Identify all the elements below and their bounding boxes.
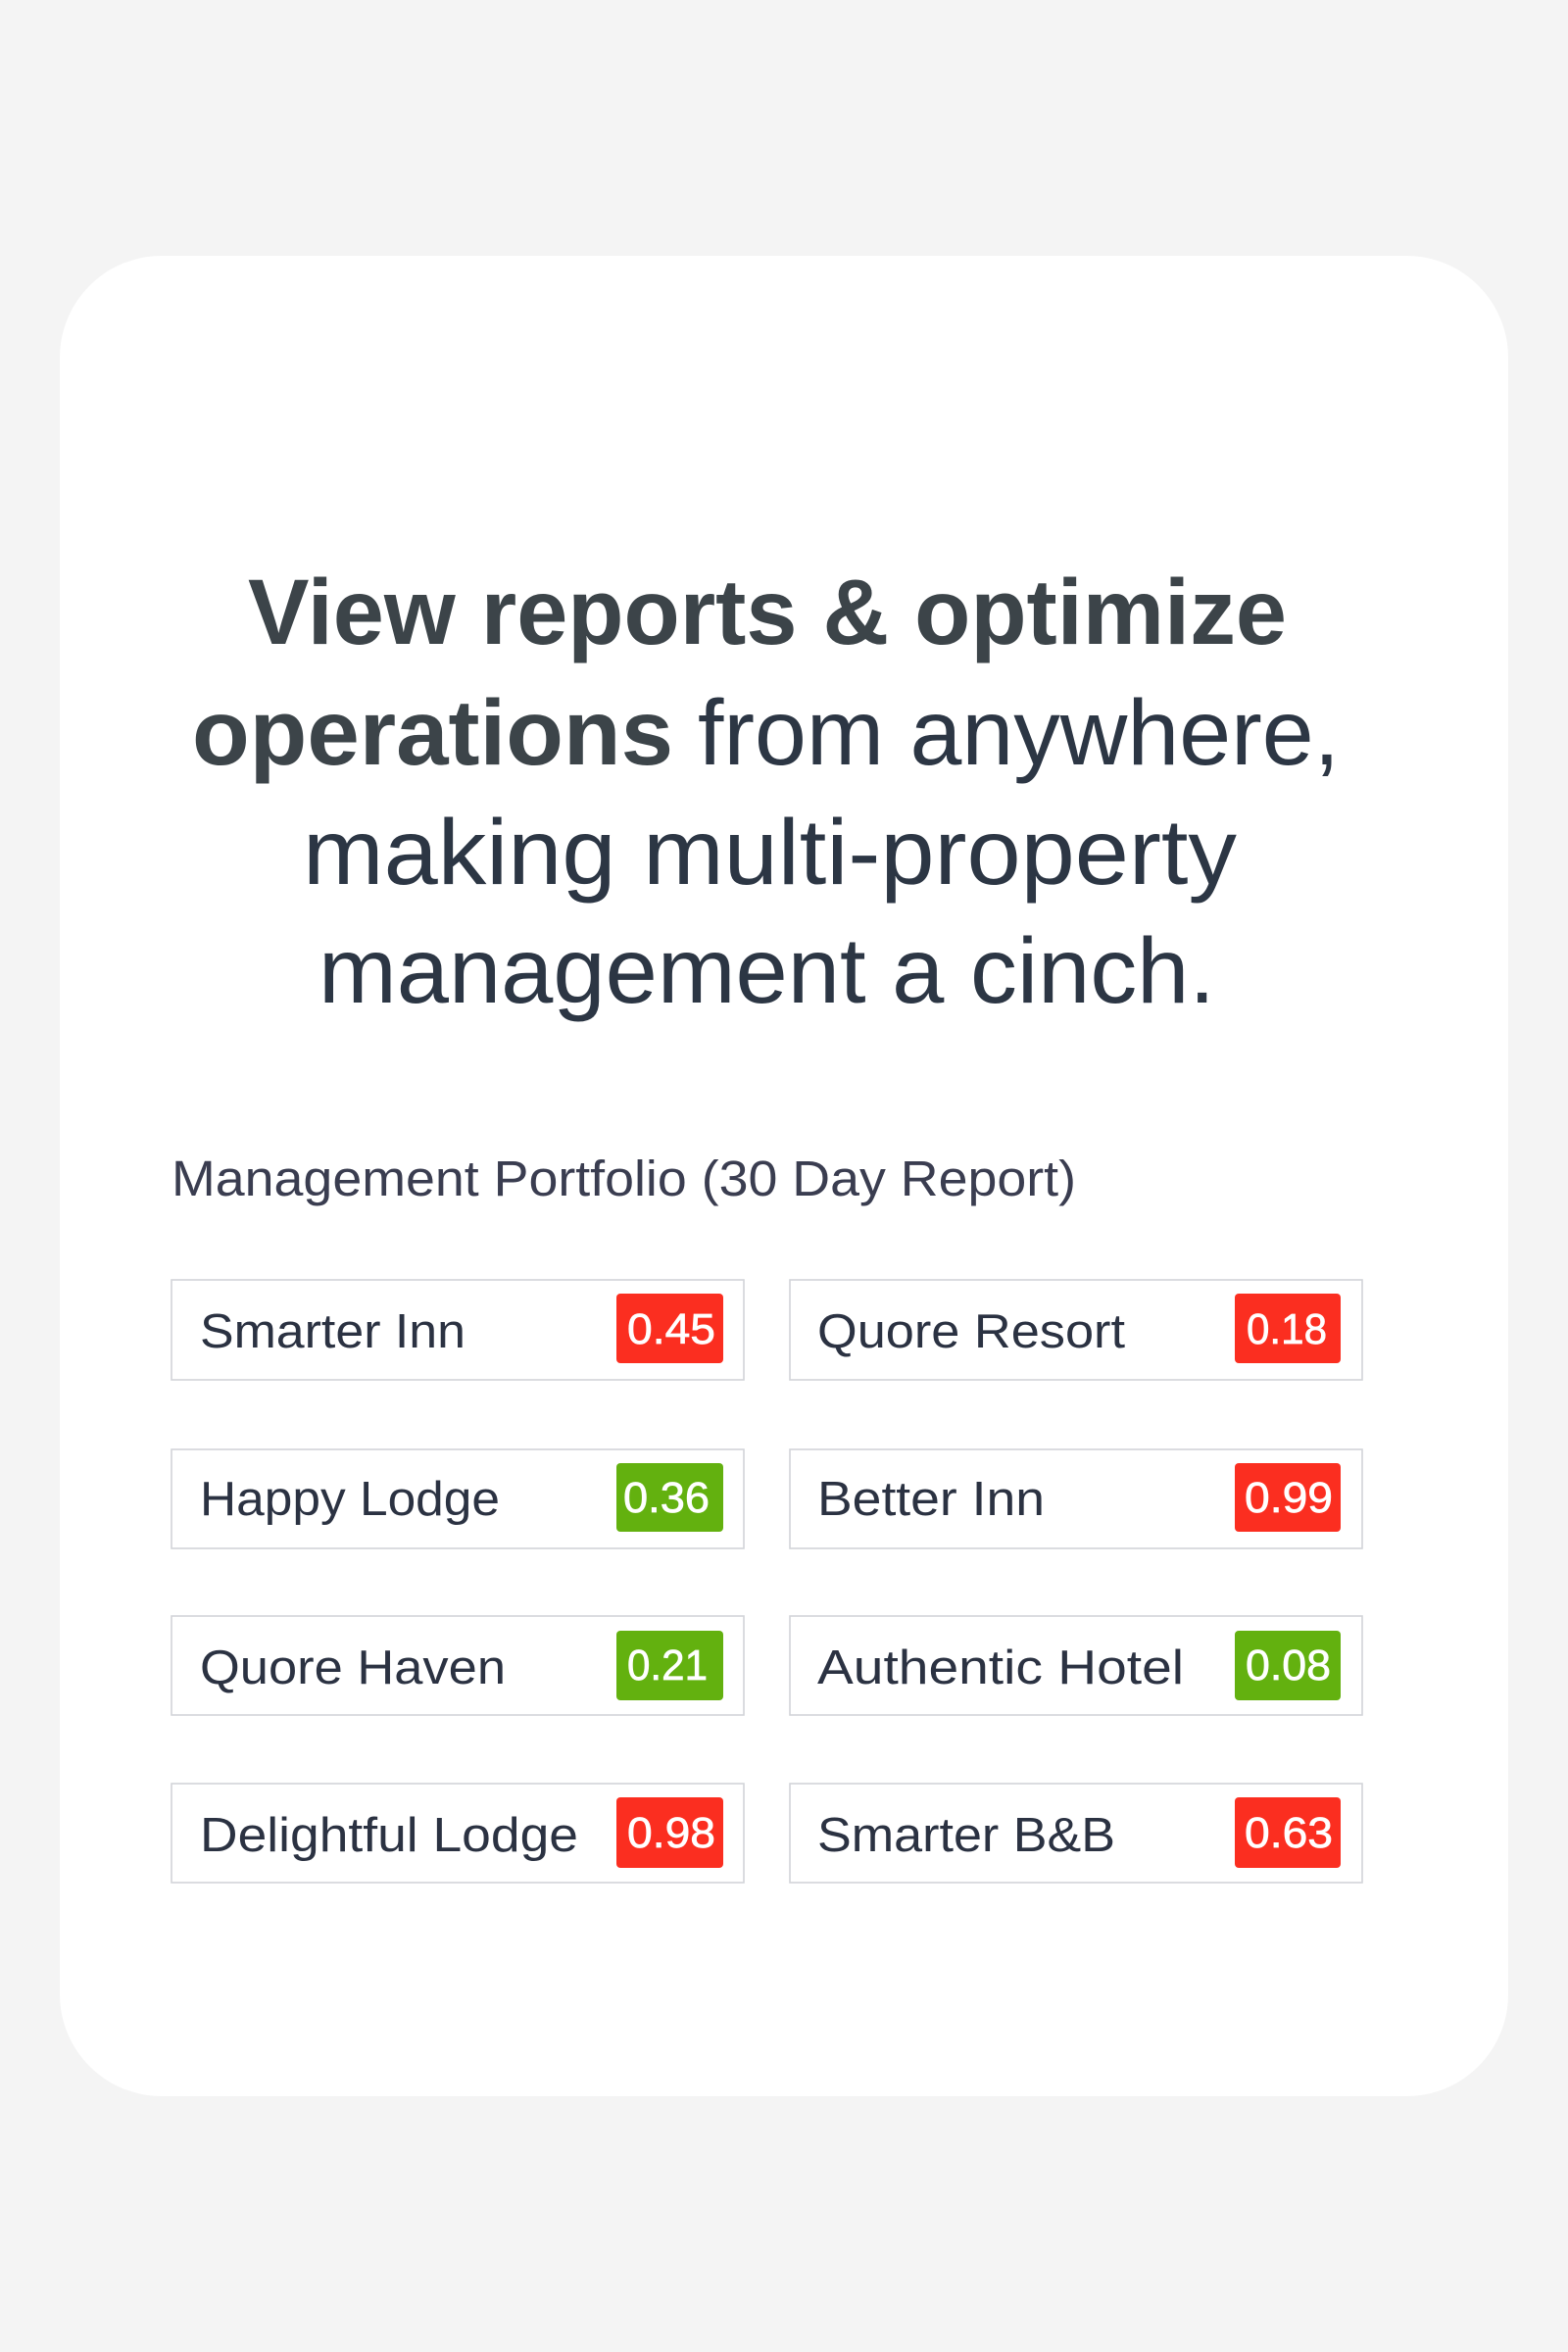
- row: Smarter B&B: 0.63: [1245, 1809, 1333, 1857]
- title: [192, 561, 1340, 1023]
- row: Better Inn: [790, 1449, 1362, 1548]
- row: Smarter Inn: 0.45: [627, 1305, 715, 1353]
- row: Smarter B&B: [790, 1784, 1362, 1883]
- title: from anywhere,: [698, 681, 1340, 785]
- subtitle: portfolio report heading: Management Portfolio (30 Day Report): [172, 1151, 1076, 1206]
- title: making multi-property: [303, 801, 1238, 905]
- row: Quore Haven: Quore Haven: [200, 1642, 506, 1694]
- row: Authentic Hotel: 0.08: [1246, 1642, 1331, 1690]
- row: Better Inn: Better Inn: [817, 1473, 1045, 1526]
- title: operations: [192, 681, 673, 785]
- row: Authentic Hotel: Authentic Hotel: [817, 1642, 1184, 1694]
- row: Happy Lodge: [172, 1449, 744, 1548]
- row: Quore Resort: 0.18: [1247, 1305, 1327, 1353]
- panel: white card: [60, 256, 1508, 2096]
- row: Quore Resort: Quore Resort: [817, 1305, 1125, 1358]
- row: Better Inn: 0.99: [1245, 1474, 1333, 1522]
- row: Quore Haven: 0.21: [627, 1642, 708, 1690]
- row: Smarter B&B: Smarter B&B: [817, 1809, 1115, 1862]
- row: Quore Resort: [790, 1280, 1362, 1380]
- row: Delightful Lodge: Delightful Lodge: [200, 1809, 578, 1862]
- row: Smarter Inn: Smarter Inn: [200, 1305, 466, 1358]
- row: Smarter Inn: [172, 1280, 744, 1380]
- row: Happy Lodge: Happy Lodge: [200, 1473, 500, 1526]
- title: management a cinch.: [318, 919, 1215, 1023]
- row: Delightful Lodge: [172, 1784, 744, 1883]
- row: Quore Haven: [172, 1616, 744, 1715]
- row: Delightful Lodge: 0.98: [627, 1809, 715, 1857]
- row: Authentic Hotel: [790, 1616, 1362, 1715]
- title: View reports & optimize: [248, 561, 1287, 664]
- row: Happy Lodge: 0.36: [623, 1474, 710, 1522]
